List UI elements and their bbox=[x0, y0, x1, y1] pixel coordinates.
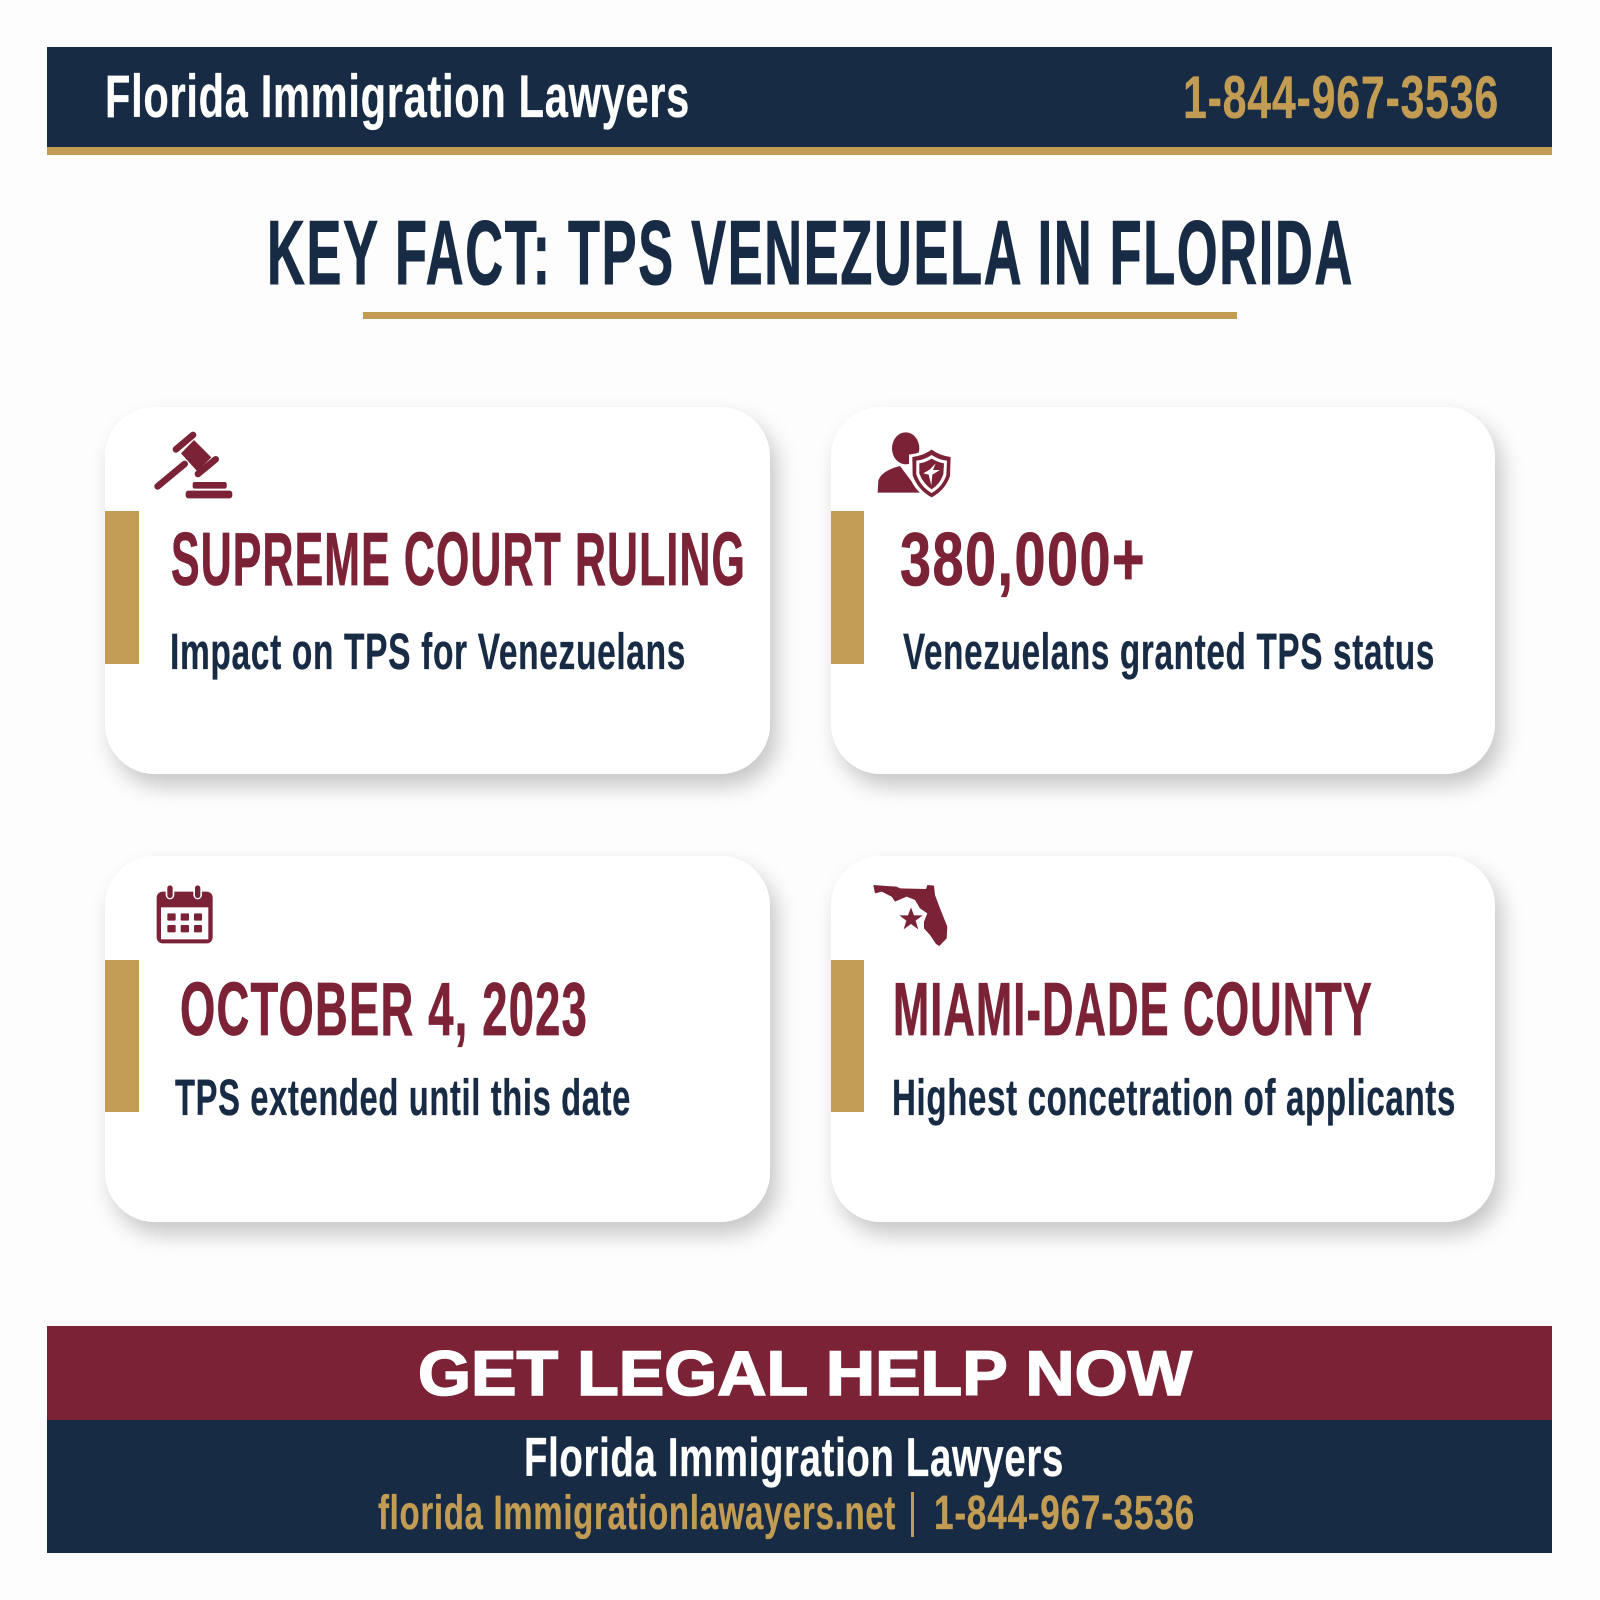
icon: gavel bbox=[158, 435, 232, 498]
footer firm name: Florida Immigration Lawyers bbox=[524, 1426, 1064, 1488]
header bar bbox=[47, 47, 1552, 155]
footer website and phone: 1-844-967-3536 bbox=[934, 1487, 1195, 1540]
card heading: 380,000+ bbox=[900, 517, 1146, 601]
card heading: SUPREME COURT RULING bbox=[171, 517, 746, 601]
panel: Miami-Dade County bbox=[831, 856, 1495, 1222]
gold accent bar bbox=[831, 960, 864, 1112]
call to action: GET LEGAL HELP NOW bbox=[418, 1339, 1193, 1409]
gold accent bar bbox=[831, 511, 864, 664]
footer website and phone: florida Immigrationlawayers.net bbox=[378, 1487, 896, 1540]
panel: TPS recipients bbox=[831, 407, 1495, 774]
gold accent bar bbox=[105, 511, 139, 664]
card description: TPS extended until this date bbox=[175, 1069, 631, 1126]
icon: Florida map with star bbox=[873, 885, 947, 946]
gold accent bar bbox=[105, 960, 139, 1112]
icon: person with shield bbox=[878, 432, 954, 501]
icon: calendar bbox=[157, 884, 213, 943]
footer banner bbox=[47, 1326, 1552, 1553]
card description: Impact on TPS for Venezuelans bbox=[170, 623, 686, 680]
panel: extension date bbox=[105, 856, 770, 1222]
panel: supreme court ruling bbox=[105, 407, 770, 774]
card heading: OCTOBER 4, 2023 bbox=[180, 967, 588, 1051]
header firm name: Florida Immigration Lawyers bbox=[105, 63, 690, 130]
